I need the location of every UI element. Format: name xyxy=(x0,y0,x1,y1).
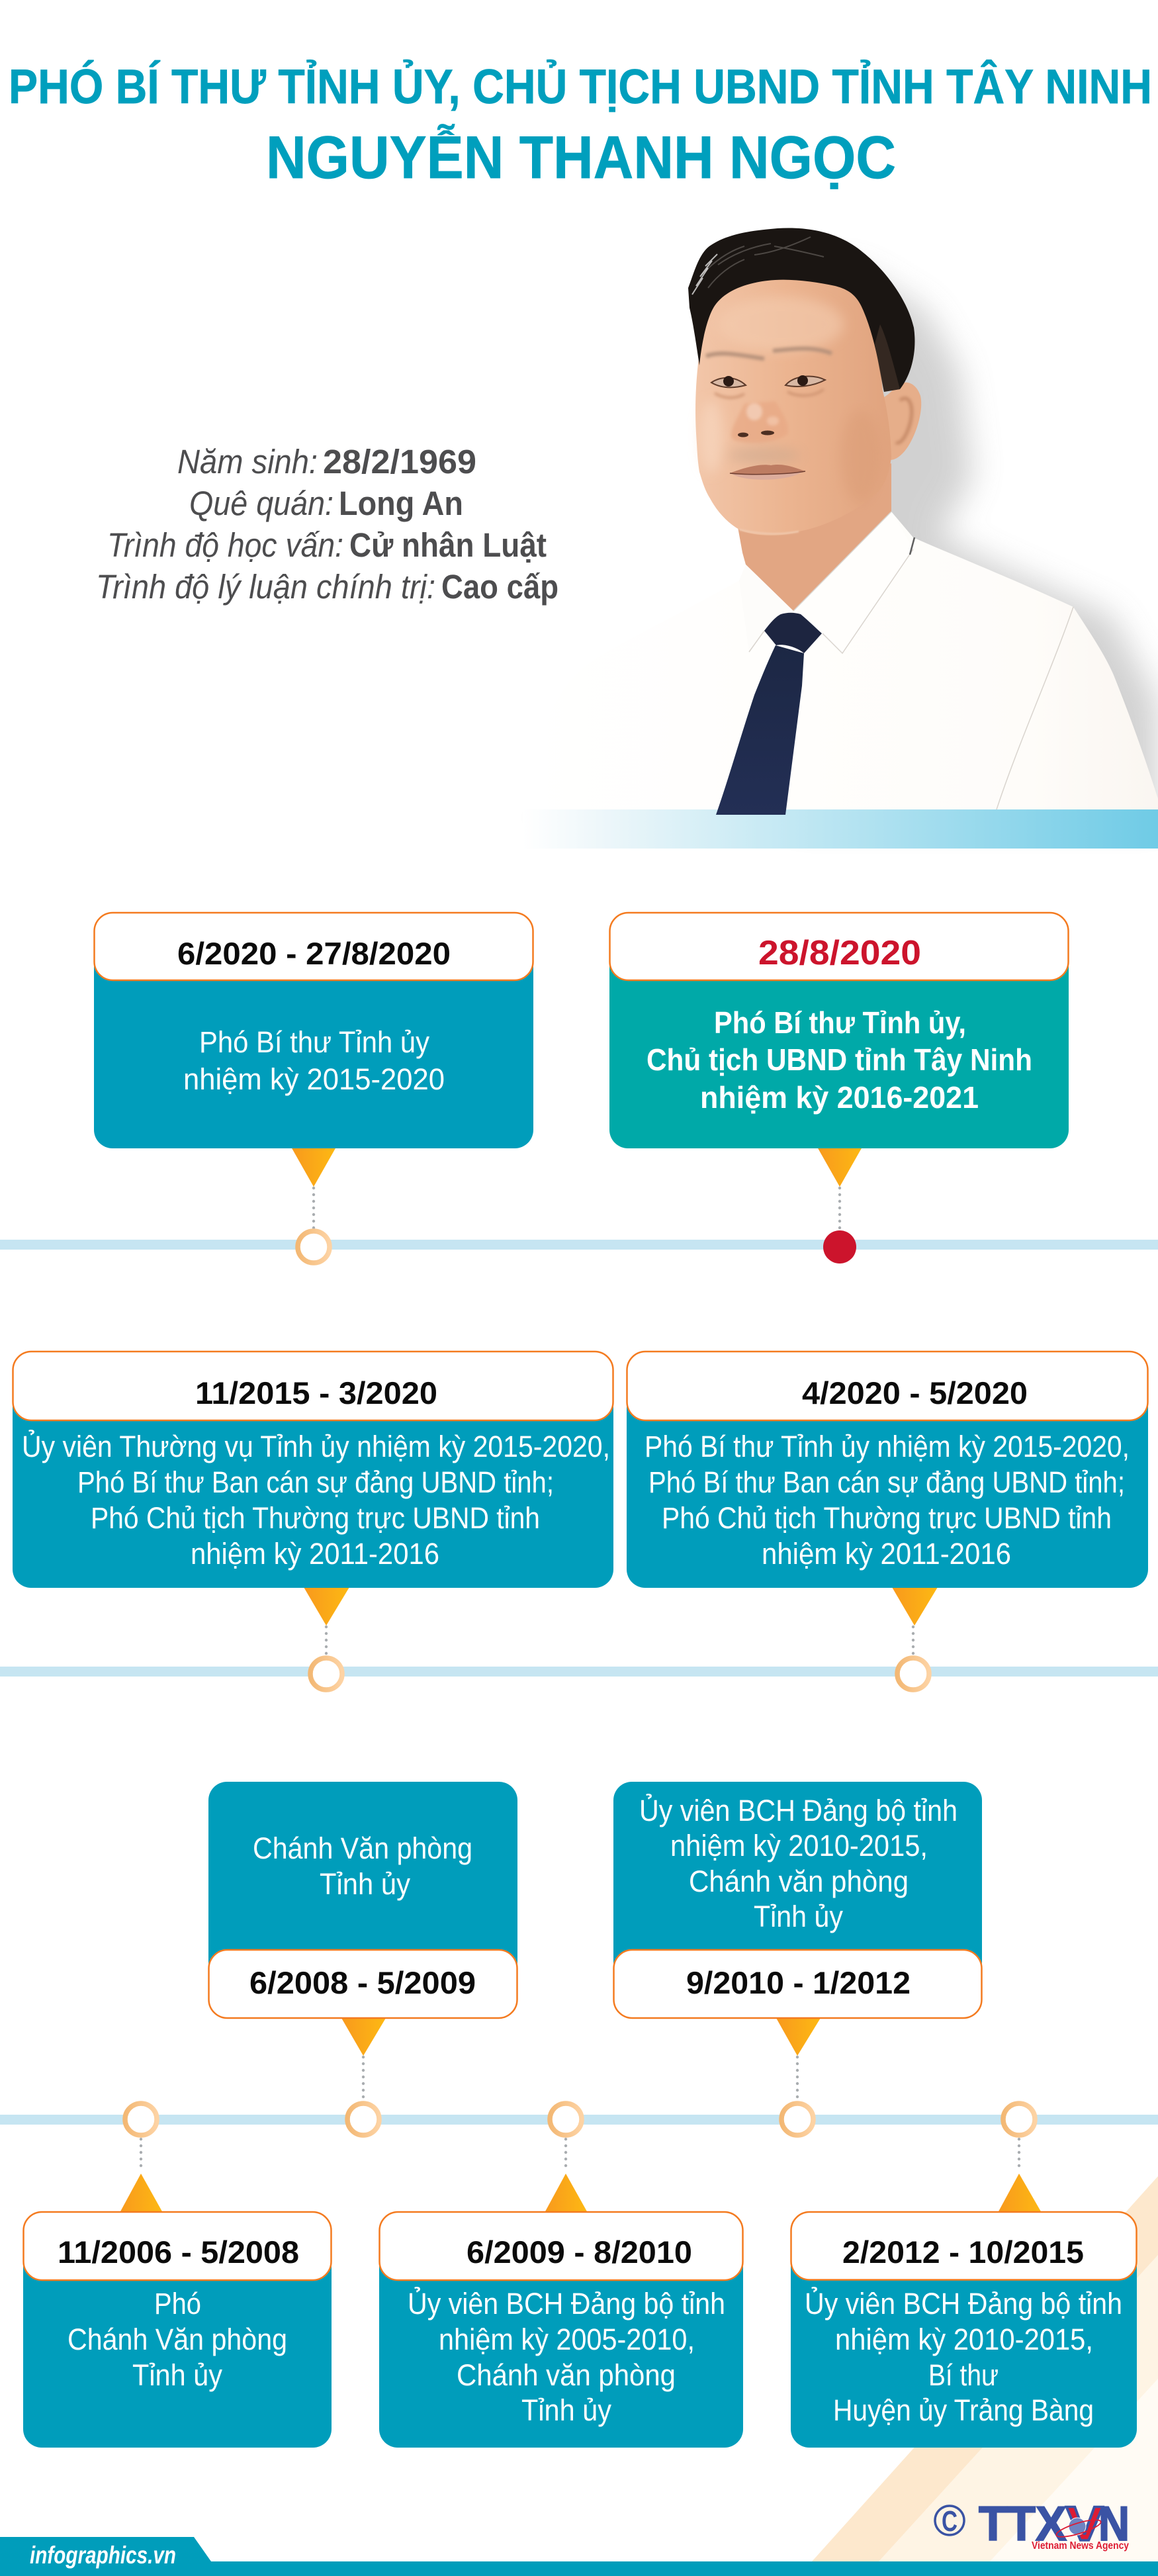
text block: personal details: 28/2/1969 xyxy=(323,443,476,481)
footer bar: infographics.vn xyxy=(30,2542,176,2569)
panel: 4/2020 - 5/2020: 4/2020 - 5/2020 xyxy=(802,1375,1028,1410)
timeline 1 xyxy=(0,1147,1158,1264)
panel: 11/2015 - 3/2020: nhiệm kỳ 2011-2016 xyxy=(191,1537,439,1571)
panel: 6/2020 - 27/8/2020: nhiệm kỳ 2015-2020 xyxy=(183,1062,445,1096)
connector: 6/2009 xyxy=(545,2103,588,2213)
panel: 6/2008 - 5/2009 xyxy=(208,1782,517,2018)
logo: TTXVN xyxy=(935,2497,1130,2552)
panel: 4/2020 - 5/2020: Phó Chủ tịch Thường trực UBND tỉnh xyxy=(662,1501,1112,1535)
logo: TTXVN: TTX xyxy=(979,2497,1067,2551)
logo: TTXVN: C xyxy=(942,2505,958,2538)
logo: TTXVN: N xyxy=(1098,2497,1130,2551)
panel: 11/2015 - 3/2020: Phó Chủ tịch Thường trực UBND tỉnh xyxy=(91,1501,540,1535)
panel: 2/2012 - 10/2015: nhiệm kỳ 2010-2015, xyxy=(835,2323,1093,2356)
ribbon xyxy=(523,809,1158,849)
collar xyxy=(739,565,793,652)
text block: personal details xyxy=(96,443,558,606)
neck skin xyxy=(736,463,891,611)
text block: personal details: Cao cấp xyxy=(441,568,558,606)
panel: 28/8/2020: 28/8/2020 xyxy=(758,934,921,972)
tie xyxy=(716,645,804,815)
text block: personal details: Trình độ học vấn: xyxy=(107,526,343,564)
panel: 9/2010 - 1/2012: 9/2010 - 1/2012 xyxy=(686,1965,911,2000)
panel: 2/2012 - 10/2015: Huyện ủy Trảng Bàng xyxy=(833,2393,1094,2427)
text block: personal details: Cử nhân Luật xyxy=(349,526,547,564)
text block: personal details: Long An xyxy=(339,484,463,522)
panel: 11/2006 - 5/2008: 11/2006 - 5/2008 xyxy=(58,2234,299,2270)
panel: 9/2010 - 1/2012: Ủy viên BCH Đảng bộ tỉnh xyxy=(639,1794,958,1827)
connector: 2/2012 xyxy=(998,2103,1042,2213)
text block: personal details: Quê quán: xyxy=(189,484,334,522)
panel: 6/2008 - 5/2009: 6/2008 - 5/2009 xyxy=(249,1965,476,2000)
text block: personal details: Trình độ lý luận chính trị: xyxy=(96,568,435,606)
panel: 28/8/2020: Chủ tịch UBND tỉnh Tây Ninh xyxy=(646,1042,1032,1077)
panel: 11/2015 - 3/2020 xyxy=(13,1352,613,1588)
panel: 6/2009 - 8/2010: Tỉnh ủy xyxy=(521,2393,611,2427)
panel: 6/2009 - 8/2010: 6/2009 - 8/2010 xyxy=(467,2234,692,2270)
hair xyxy=(688,228,914,392)
panel: 6/2020 - 27/8/2020: Phó Bí thư Tỉnh ủy xyxy=(199,1025,429,1059)
panel: 11/2006 - 5/2008 xyxy=(23,2212,332,2448)
panel: 11/2015 - 3/2020: Ủy viên Thường vụ Tỉnh ủy nhiệm kỳ 2015-2020, xyxy=(22,1430,610,1463)
logo: TTXVN: Vietnam News Agency xyxy=(1032,2540,1129,2552)
panel: 6/2008 - 5/2009: Tỉnh ủy xyxy=(320,1867,410,1901)
title: NGUYỄN THANH NGỌC xyxy=(266,124,896,191)
panel: 9/2010 - 1/2012 xyxy=(613,1782,982,2018)
shirt xyxy=(523,512,1158,809)
panel: 6/2020 - 27/8/2020: 6/2020 - 27/8/2020 xyxy=(177,936,451,971)
connector: 9/2010 xyxy=(776,2018,821,2135)
mouth xyxy=(730,465,805,474)
panel: 6/2009 - 8/2010: Ủy viên BCH Đảng bộ tỉnh xyxy=(408,2287,725,2321)
face xyxy=(695,271,891,535)
footer bar xyxy=(0,2537,1158,2576)
panel: 2/2012 - 10/2015: Bí thư xyxy=(928,2358,999,2392)
panel: 28/8/2020 xyxy=(609,913,1069,1148)
logo: TTXVN: V xyxy=(1066,2497,1103,2551)
panel: 9/2010 - 1/2012: Tỉnh ủy xyxy=(754,1900,843,1933)
connector: 28/8/2020 xyxy=(817,1147,862,1264)
timeline 2 xyxy=(0,1587,1158,1690)
text block: personal details: Năm sinh: xyxy=(177,443,318,481)
title xyxy=(9,60,1152,191)
connector: 11/2015 xyxy=(304,1587,349,1690)
ear xyxy=(884,383,921,460)
background: diagonal bands xyxy=(812,2176,1158,2561)
panel: 6/2009 - 8/2010: Chánh văn phòng xyxy=(457,2358,676,2392)
panel: 11/2015 - 3/2020: Phó Bí thư Ban cán sự đảng UBND tỉnh; xyxy=(77,1465,554,1499)
panel: 2/2012 - 10/2015: 2/2012 - 10/2015 xyxy=(842,2234,1084,2270)
panel: 6/2009 - 8/2010 xyxy=(379,2212,743,2448)
connector: 6/2008 xyxy=(341,2018,386,2135)
panel: 9/2010 - 1/2012: nhiệm kỳ 2010-2015, xyxy=(670,1829,928,1863)
panel: 11/2006 - 5/2008: Chánh Văn phòng xyxy=(67,2323,287,2356)
panel: 28/8/2020: Phó Bí thư Tỉnh ủy, xyxy=(714,1005,966,1040)
panel: 11/2006 - 5/2008: Phó xyxy=(154,2287,201,2321)
connector: 6/2020 xyxy=(291,1147,336,1263)
panel: 6/2020 - 27/8/2020 xyxy=(94,913,533,1148)
panel: 2/2012 - 10/2015: Ủy viên BCH Đảng bộ tỉnh xyxy=(805,2287,1122,2321)
moustache shadow xyxy=(728,447,801,463)
panel: 6/2008 - 5/2009: Chánh Văn phòng xyxy=(253,1831,472,1865)
panel: 11/2006 - 5/2008: Tỉnh ủy xyxy=(132,2358,222,2392)
panel: 6/2009 - 8/2010: nhiệm kỳ 2005-2010, xyxy=(439,2323,695,2356)
panel: 2/2012 - 10/2015 xyxy=(791,2212,1137,2448)
nose xyxy=(731,401,788,443)
panel: 4/2020 - 5/2020 xyxy=(627,1352,1148,1588)
timeline 3 xyxy=(0,2018,1158,2213)
panel: 11/2015 - 3/2020: 11/2015 - 3/2020 xyxy=(195,1375,437,1410)
portrait xyxy=(523,228,1158,849)
panel: 9/2010 - 1/2012: Chánh văn phòng xyxy=(689,1864,909,1898)
connector: 11/2006 xyxy=(120,2103,163,2213)
panel: 4/2020 - 5/2020: nhiệm kỳ 2011-2016 xyxy=(762,1537,1011,1571)
eyebrows xyxy=(706,349,832,359)
connector: 4/2020 xyxy=(892,1587,938,1690)
panel: 28/8/2020: nhiệm kỳ 2016-2021 xyxy=(700,1080,979,1115)
eyes xyxy=(711,378,746,387)
